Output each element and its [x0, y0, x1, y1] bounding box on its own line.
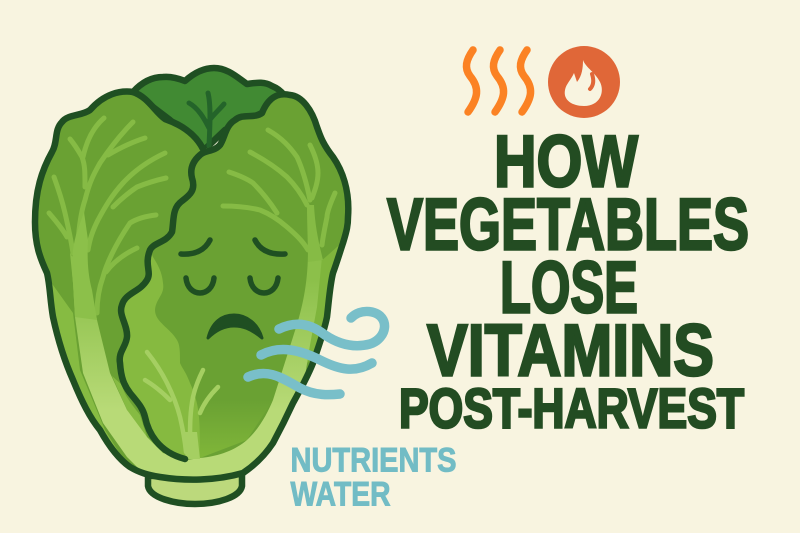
back leaf vein	[189, 93, 224, 146]
icon: flame badge	[548, 46, 620, 118]
title: LOSE	[500, 248, 638, 328]
heat waves icon	[466, 50, 531, 112]
illustration: sad lettuce	[35, 68, 348, 504]
thick right rib	[307, 205, 323, 262]
left eye	[186, 278, 214, 293]
infographic canvas	[32, 46, 748, 508]
right eyebrow	[255, 240, 285, 254]
nutrients and water labels: NUTRIENTS	[290, 442, 456, 480]
title	[387, 122, 749, 440]
mid green left wedge	[52, 284, 118, 452]
left eyebrow	[181, 240, 210, 254]
back leaf	[133, 68, 284, 150]
stem base	[148, 474, 242, 504]
wind lines	[248, 311, 385, 395]
sad face	[181, 240, 285, 338]
pale rim band with ribs	[70, 250, 322, 480]
right eye	[250, 278, 278, 293]
lower leaf shading	[200, 421, 258, 458]
thick left rib	[72, 212, 97, 320]
title: HOW	[494, 122, 638, 202]
left leaf veins	[49, 118, 166, 313]
main leaf body	[35, 92, 348, 480]
center leaf edge	[120, 92, 220, 459]
mid green sliver beside inner leaf	[112, 376, 148, 440]
mid green right wedge	[307, 246, 338, 362]
leaf outline	[35, 92, 348, 480]
nutrients and water labels: WATER	[290, 476, 391, 514]
right leaf veins	[223, 130, 335, 250]
title: VITAMINS	[427, 310, 714, 392]
nutrients and water labels	[290, 442, 456, 514]
sad mouth	[208, 315, 262, 338]
light inner leaf patch	[120, 250, 200, 459]
lower leaf veins	[145, 352, 218, 452]
lower stem	[182, 432, 200, 459]
